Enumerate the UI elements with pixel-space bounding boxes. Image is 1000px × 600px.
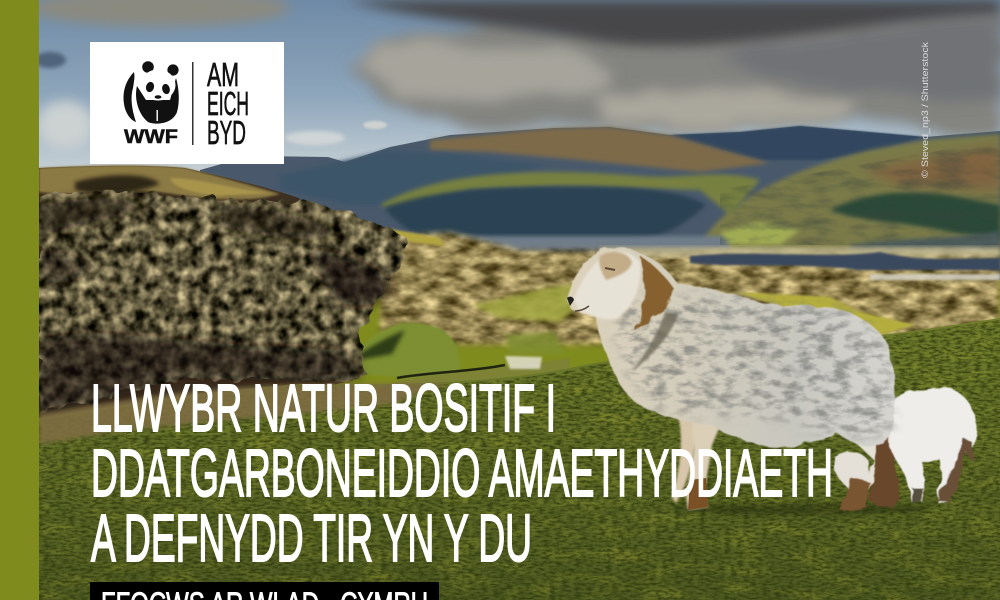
title <box>91 371 833 576</box>
ewe front legs <box>672 415 700 503</box>
WWF wordmark: WWF <box>124 127 178 148</box>
tagline: BYD <box>207 114 246 151</box>
title: A DEFNYDD TIR YN Y DU <box>91 501 532 576</box>
sky <box>30 0 1000 175</box>
lamb <box>834 388 976 503</box>
ewe wool shading <box>617 295 892 437</box>
tagline <box>207 56 249 151</box>
logo panel: WWF Am Eich Byd <box>90 42 284 164</box>
ewe and lamb <box>567 248 976 515</box>
distant mountains <box>200 126 1000 280</box>
olive side band <box>0 0 39 600</box>
ewe shadow <box>670 503 930 515</box>
valley fields <box>347 232 1000 390</box>
photo credit: © Steved_np3 / Shutterstock <box>920 42 931 178</box>
tagline: AM <box>207 56 239 93</box>
wooded hill <box>39 165 542 420</box>
ewe body <box>567 248 895 447</box>
subtitle tag <box>90 582 439 600</box>
foreground grass <box>39 318 1000 600</box>
ewe back legs <box>853 435 890 490</box>
title: LLWYBR NATUR BOSITIF I <box>91 371 556 446</box>
icon: WWF panda <box>123 61 179 124</box>
logo divider <box>192 62 194 145</box>
tagline: EICH <box>207 85 249 122</box>
